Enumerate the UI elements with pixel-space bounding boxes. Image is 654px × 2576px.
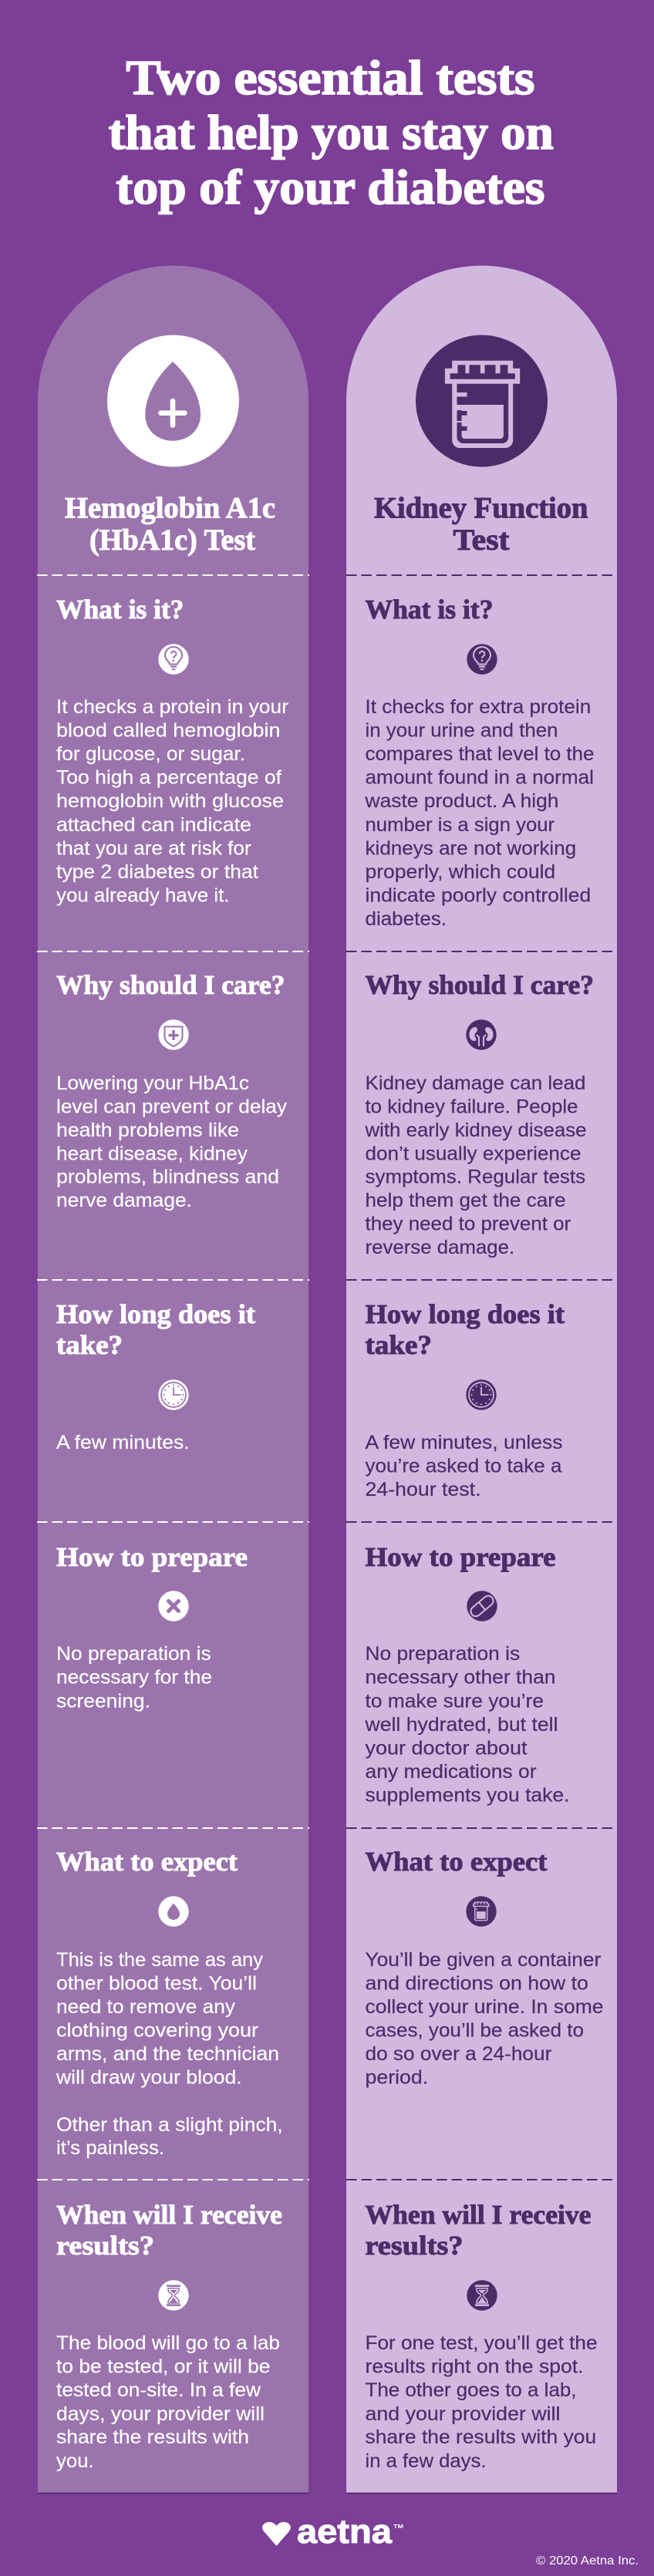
- right column bottom edge: [346, 2493, 617, 2494]
- body text: and your provider will: [366, 2403, 560, 2425]
- body text: [56, 1072, 288, 1211]
- body text: for glucose, or sugar.: [56, 743, 245, 765]
- body text: necessary for the: [56, 1667, 212, 1689]
- body text: type 2 diabetes or that: [56, 861, 258, 883]
- body text: you already have it.: [56, 884, 230, 906]
- left column bottom edge: [38, 2493, 308, 2494]
- title: [109, 50, 554, 214]
- body text: The other goes to a lab,: [366, 2379, 577, 2401]
- body text: heart disease, kidney: [56, 1143, 248, 1164]
- title: that help you stay on: [109, 105, 554, 160]
- body text: Lowering your HbA1c: [56, 1072, 249, 1094]
- icon: light bulb question: [158, 644, 189, 675]
- body text: need to remove any: [56, 1996, 236, 2018]
- body text: blood called hemoglobin: [56, 720, 281, 742]
- left column background: [38, 265, 308, 2494]
- body text: compares that level to the: [366, 743, 594, 765]
- body text: reverse damage.: [366, 1237, 514, 1258]
- body text: A few minutes, unless: [366, 1432, 563, 1453]
- body text: [56, 1949, 283, 2159]
- body text: kidneys are not working: [366, 837, 576, 859]
- body text: [364, 1643, 569, 1806]
- heading: Why should I care?: Why should I care?: [56, 970, 285, 1000]
- body text: It checks a protein in your: [56, 696, 288, 718]
- body text: This is the same as any: [56, 1949, 263, 1971]
- body text: cases, you’ll be asked to: [366, 2020, 584, 2042]
- heading: How to prepare: How to prepare: [56, 1542, 248, 1572]
- heading: When will I receive results?: When will I receive: [56, 2200, 282, 2230]
- body text: The blood will go to a lab: [56, 2332, 280, 2354]
- heading: When will I receive results?: [366, 2200, 591, 2261]
- body text: [364, 696, 594, 930]
- icon: hourglass: [158, 2280, 189, 2311]
- body text: nerve damage.: [56, 1190, 192, 1211]
- heading: How long does it take?: [366, 1299, 565, 1360]
- heading: Hemoglobin A1c (HbA1c) Test: Hemoglobin A1c: [65, 492, 275, 524]
- section: what is it (right): [364, 594, 594, 930]
- body text: necessary other than: [366, 1667, 555, 1689]
- heading: Hemoglobin A1c (HbA1c) Test: (HbA1c) Test: [89, 524, 255, 557]
- section: how long does it take (right): [366, 1299, 565, 1500]
- body text: in a few days.: [366, 2450, 486, 2472]
- body text: results right on the spot.: [366, 2356, 583, 2378]
- copyright: © 2020 Aetna Inc.: [536, 2554, 639, 2568]
- icon: kidneys: [466, 1019, 497, 1050]
- trademark: TM: [393, 2523, 403, 2530]
- body text: will draw your blood.: [56, 2066, 242, 2088]
- body text: [364, 1072, 586, 1258]
- body text: Other than a slight pinch,: [56, 2114, 283, 2136]
- section: how to prepare (left): [56, 1542, 248, 1712]
- heading: How long does it take?: How long does it: [56, 1299, 255, 1329]
- body text: indicate poorly controlled: [366, 884, 591, 906]
- heading: When will I receive results?: When will I receive: [366, 2200, 591, 2230]
- icon: shield with plus: [158, 1019, 189, 1050]
- heading: How long does it take?: take?: [56, 1330, 123, 1360]
- body text: You’ll be given a container: [366, 1949, 601, 1971]
- body text: clothing covering your: [56, 2020, 258, 2042]
- heading: When will I receive results?: [56, 2200, 282, 2261]
- icon: pill: [467, 1591, 497, 1621]
- body text: waste product. A high: [364, 790, 558, 812]
- icon: clock: [466, 1379, 497, 1410]
- heading: Kidney Function Test: Kidney Function: [374, 492, 588, 524]
- body text: A few minutes.: [56, 1432, 190, 1453]
- body text: [56, 2332, 280, 2472]
- body text: days, your provider will: [56, 2403, 265, 2425]
- heading: How long does it take?: How long does it: [366, 1299, 565, 1329]
- body text: screening.: [56, 1690, 150, 1712]
- section: what to expect (right): [366, 1847, 603, 2088]
- body text: and directions on how to: [366, 1972, 588, 1994]
- icon: clock: [158, 1379, 189, 1410]
- section: when will I receive results (left): [56, 2200, 282, 2472]
- section: when will I receive results (right): [366, 2200, 597, 2472]
- title: Two essential tests: [126, 50, 534, 105]
- body text: No preparation is: [56, 1643, 211, 1665]
- body text: No preparation is: [366, 1643, 520, 1665]
- body text: share the results with: [56, 2426, 249, 2448]
- icon: specimen jar: [416, 335, 548, 467]
- body text: For one test, you’ll get the: [366, 2332, 597, 2354]
- body text: to be tested, or it will be: [56, 2356, 270, 2378]
- section: how long does it take (left): [56, 1299, 255, 1453]
- icon: blood drop with plus: [107, 335, 239, 467]
- body text: arms, and the technician: [56, 2043, 279, 2065]
- body text: in your urine and then: [366, 720, 558, 742]
- body text: any medications or: [366, 1761, 537, 1783]
- heading: Kidney Function Test: Test: [453, 524, 509, 557]
- body text: health problems like: [56, 1120, 239, 1141]
- body text: to kidney failure. People: [366, 1096, 578, 1118]
- body text: Too high a percentage of: [56, 767, 281, 789]
- heading: Hemoglobin A1c (HbA1c) Test: [65, 492, 275, 557]
- body text: Kidney damage can lead: [366, 1072, 586, 1094]
- body text: tested on-site. In a few: [56, 2379, 261, 2401]
- body text: attached can indicate: [56, 814, 251, 836]
- panel: Kidney Function test column: [346, 265, 617, 2494]
- body text: period.: [366, 2066, 428, 2088]
- body text: diabetes.: [366, 908, 447, 930]
- logo: aetna: [262, 2513, 403, 2551]
- body text: with early kidney disease: [364, 1120, 586, 1141]
- icon: hourglass: [467, 2280, 497, 2311]
- heading: Why should I care?: Why should I care?: [366, 970, 594, 1000]
- body text: properly, which could: [366, 861, 555, 883]
- body text: you.: [56, 2450, 94, 2472]
- icon: x mark: [158, 1591, 189, 1621]
- body text: symptoms. Regular tests: [366, 1167, 585, 1188]
- body text: well hydrated, but tell: [364, 1714, 558, 1736]
- body text: problems, blindness and: [56, 1167, 279, 1188]
- body text: it’s painless.: [56, 2137, 164, 2159]
- section: how to prepare (right): [364, 1542, 569, 1806]
- section: what to expect (left): [56, 1847, 283, 2159]
- body text: amount found in a normal: [366, 767, 594, 789]
- body text: share the results with you: [366, 2426, 596, 2448]
- body text: your doctor about: [366, 1738, 528, 1759]
- section: why should I care (right): [364, 970, 594, 1258]
- body text: collect your urine. In some: [366, 1996, 603, 2018]
- heading: When will I receive results?: results?: [366, 2231, 463, 2261]
- heading: How long does it take?: take?: [366, 1330, 432, 1360]
- body text: [366, 1432, 563, 1500]
- icon: light bulb question: [467, 644, 497, 675]
- heading: When will I receive results?: results?: [56, 2231, 154, 2261]
- body text: to make sure you’re: [366, 1690, 544, 1712]
- body text: level can prevent or delay: [56, 1096, 288, 1118]
- title: top of your diabetes: [116, 160, 544, 214]
- body text: help them get the care: [366, 1190, 566, 1211]
- body text: hemoglobin with glucose: [56, 790, 284, 812]
- body text: number is a sign your: [366, 814, 555, 836]
- section: why should I care (left): [56, 970, 288, 1211]
- body text: you’re asked to take a: [366, 1456, 562, 1477]
- body text: do so over a 24-hour: [366, 2043, 551, 2065]
- body text: supplements you take.: [366, 1784, 569, 1806]
- body text: [56, 696, 288, 906]
- icon: heart: [262, 2522, 291, 2546]
- body text: [366, 1949, 603, 2088]
- body text: other blood test. You’ll: [56, 1972, 257, 1994]
- body text: that you are at risk for: [56, 837, 251, 859]
- heading: Kidney Function Test: [374, 492, 588, 557]
- heading: How long does it take?: [56, 1299, 255, 1360]
- icon: small specimen jar: [466, 1896, 497, 1927]
- section dividers, left column: [37, 575, 309, 2180]
- body text: [56, 1643, 212, 1712]
- body text: 24-hour test.: [366, 1479, 481, 1500]
- heading: How to prepare: How to prepare: [366, 1542, 555, 1572]
- body text: [366, 2332, 597, 2472]
- icon: blood drop: [158, 1896, 189, 1927]
- body text: they need to prevent or: [366, 1214, 571, 1235]
- body text: don’t usually experience: [366, 1143, 582, 1164]
- heading: What to expect: What to expect: [366, 1847, 548, 1877]
- wordmark: aetna: [297, 2513, 393, 2551]
- heading: What is it?: What is it?: [56, 594, 184, 625]
- section: what is it (left): [56, 594, 288, 906]
- right column background: [346, 265, 617, 2494]
- section dividers, right column: [346, 575, 617, 2180]
- heading: What is it?: What is it?: [366, 594, 494, 625]
- heading: What to expect: What to expect: [56, 1847, 238, 1877]
- body text: It checks for extra protein: [366, 696, 591, 718]
- panel: Hemoglobin A1c test column: [37, 265, 309, 2494]
